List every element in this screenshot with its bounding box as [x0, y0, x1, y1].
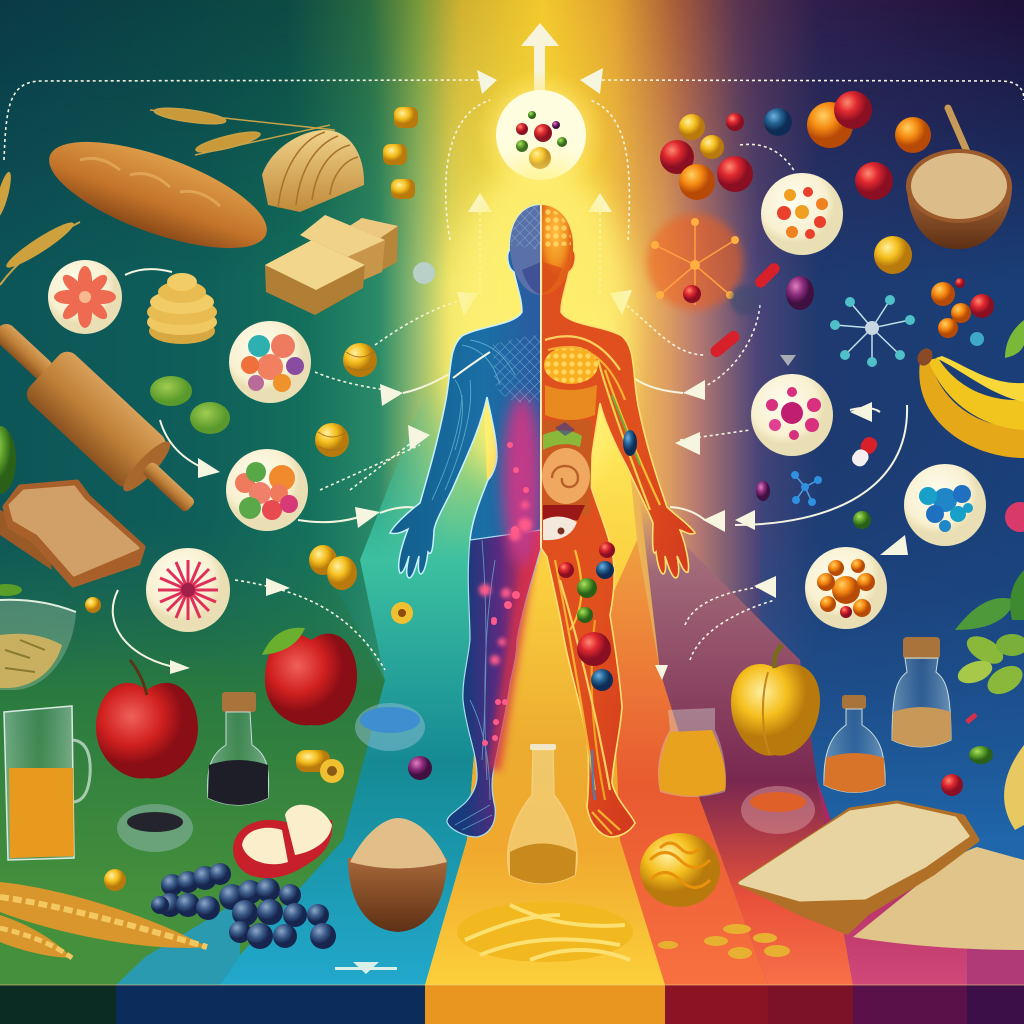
nutrient circle: fruit blobs	[226, 449, 308, 531]
floating coloured balls	[660, 91, 931, 274]
dark seed bottle	[208, 692, 269, 805]
wheat sprigs left	[0, 171, 80, 285]
leg food items	[577, 632, 611, 666]
top central nutrient disc	[475, 69, 607, 201]
wheat sprigs top	[150, 105, 335, 156]
red orange cluster	[931, 278, 994, 346]
red capsules and plum	[708, 261, 871, 529]
teal molecule	[830, 295, 915, 367]
small pasta nuggets	[383, 107, 418, 199]
yellow pasta pile	[457, 902, 633, 962]
left abdomen colour	[503, 395, 541, 565]
bowl of grain with spoon	[906, 108, 1012, 249]
muscle strands right	[545, 336, 660, 834]
green apple edge	[0, 426, 16, 494]
leaves right edge	[955, 320, 1024, 700]
nutrient circle: orange blobs	[805, 547, 887, 629]
yellow bell pepper	[731, 645, 820, 756]
dark speck sphere	[730, 285, 760, 315]
bottom colour strip	[0, 985, 1024, 1024]
small blue molecule	[791, 471, 822, 506]
body glow	[445, 160, 635, 500]
coloured pathway bands	[0, 300, 1024, 985]
down arrow	[335, 962, 397, 974]
red apple right	[262, 628, 357, 725]
nutrient circle: pink starburst	[146, 548, 230, 632]
sand pile and bread slice	[740, 803, 1024, 950]
apple slices	[233, 805, 332, 878]
right head brain	[541, 205, 573, 295]
left leg inner red glow	[494, 560, 528, 770]
left chest mesh	[492, 335, 541, 403]
green florets	[150, 376, 230, 434]
orange curly pasta	[640, 833, 720, 907]
orange powder flask	[658, 708, 726, 797]
dish of dark seeds	[117, 804, 193, 852]
toast slices	[0, 482, 143, 585]
intestines	[542, 420, 592, 540]
dish of orange powder	[741, 786, 815, 834]
coiled pasta	[147, 273, 217, 344]
bananas	[914, 346, 1024, 458]
arrowheads	[170, 68, 908, 680]
right arm and torso	[541, 205, 695, 837]
yellow cylinders	[85, 545, 413, 624]
pink energy sparks	[479, 442, 532, 746]
raspberry edge	[1005, 502, 1024, 532]
orange molecular burst	[647, 214, 743, 310]
central flask with amber liquid	[508, 744, 577, 884]
nutrient circle: red flower	[48, 260, 122, 334]
human body figure	[390, 160, 695, 837]
small spheres	[408, 262, 435, 780]
blue capsule on forearm	[623, 430, 637, 456]
rolling pin	[0, 304, 213, 531]
small orange bottle	[824, 695, 885, 792]
stacked squares	[265, 215, 398, 315]
yellow pasta shells	[315, 343, 377, 457]
red white capsule	[849, 434, 880, 469]
centre divide line	[540, 205, 542, 548]
glass jug with amber liquid	[4, 706, 90, 860]
nutrient circle: blue blobs	[904, 464, 986, 546]
scattered seeds	[658, 924, 790, 959]
red apple left	[96, 660, 198, 778]
chest yellow organ	[544, 346, 598, 384]
baguette	[37, 120, 279, 270]
shoulder muscle lines	[432, 340, 515, 830]
wheat ears bottom left	[0, 882, 207, 958]
dashed connector lines	[4, 80, 1024, 670]
top central arrow	[521, 23, 559, 93]
dish of blue powder	[355, 703, 425, 751]
nutrient circle: orange red dots	[761, 173, 843, 255]
nutrient circle: pink dots	[751, 374, 833, 456]
stomach orange area	[545, 385, 597, 420]
solid connector arrows	[113, 269, 907, 668]
nutrient circle: mixed blobs	[229, 321, 311, 403]
small right items	[941, 713, 1024, 830]
glass bowl of grain	[0, 584, 76, 690]
left head	[510, 205, 541, 295]
left leg	[447, 530, 541, 837]
tall spice jar	[892, 637, 951, 747]
left arm and torso	[390, 205, 541, 578]
yellow macaroni	[104, 750, 344, 891]
sliced loaf	[262, 130, 364, 212]
blueberries	[151, 863, 336, 949]
white nerve over shoulder	[453, 352, 490, 378]
brown bowl of sand	[348, 818, 447, 932]
